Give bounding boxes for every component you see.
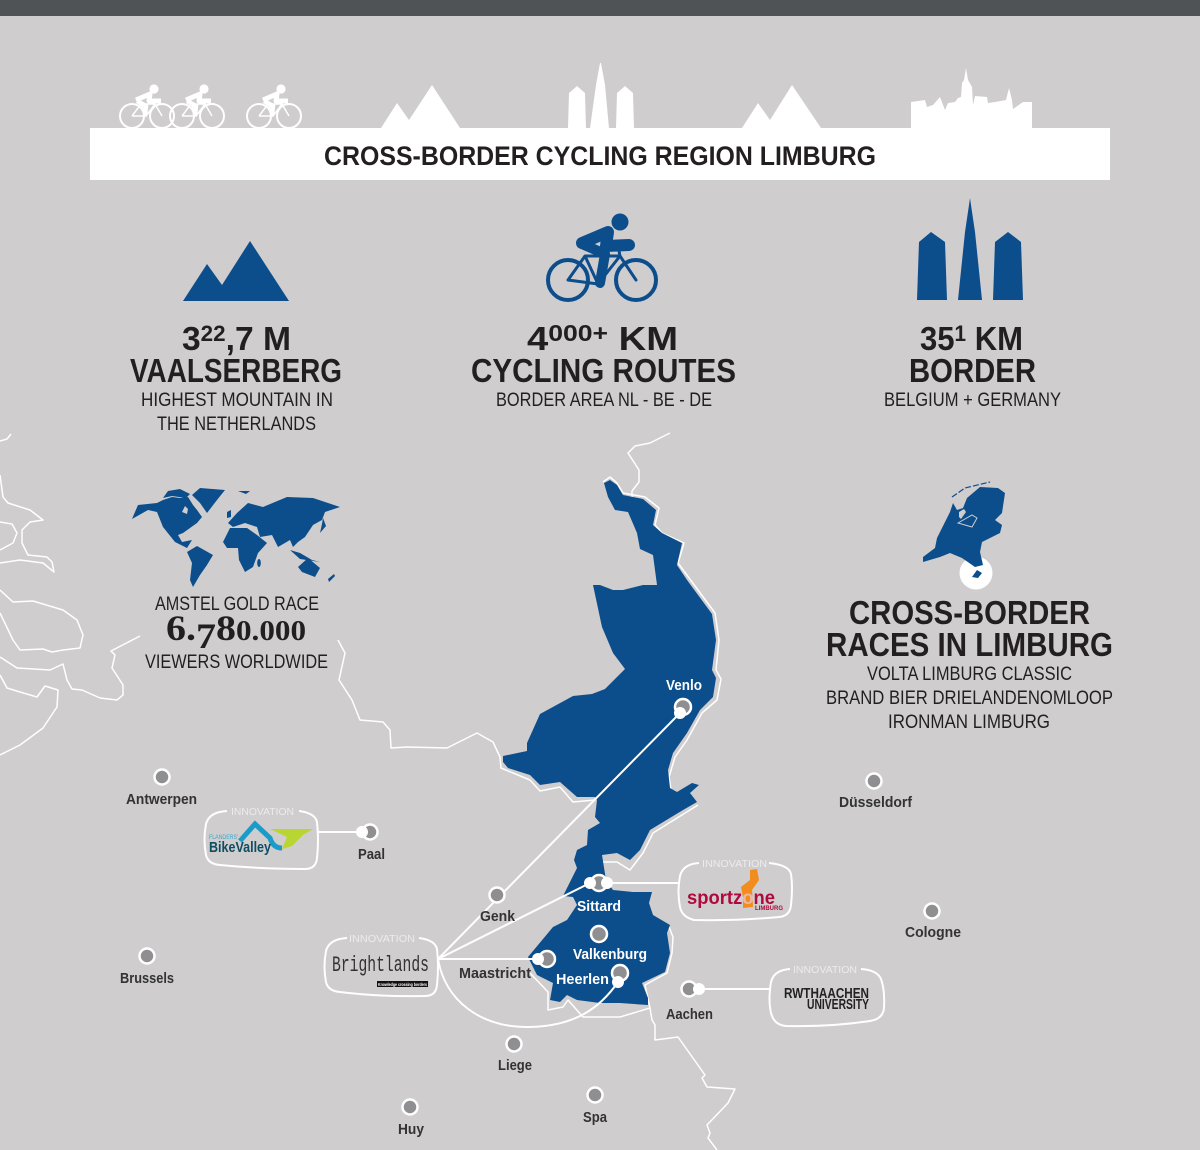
stat value: 6. xyxy=(166,608,193,648)
stat: mountain xyxy=(130,241,342,435)
stat: border xyxy=(884,198,1061,411)
stat description: HIGHEST MOUNTAIN IN xyxy=(141,390,333,411)
icon: Netherlands map xyxy=(923,482,1005,590)
race list: IRONMAN LIMBURG xyxy=(888,712,1050,733)
innovation box: Flanders Bike Valley: INNOVATION xyxy=(231,806,294,818)
city: Genk xyxy=(480,888,516,925)
stat value: 7 xyxy=(196,616,216,656)
stat heading: BORDER xyxy=(909,352,1036,389)
logo: Brightlands xyxy=(332,953,429,987)
stat: cycling routes xyxy=(471,214,736,411)
innovation box: Sportzone Limburg xyxy=(678,858,792,920)
city: Düsseldorf: Düsseldorf xyxy=(839,795,912,811)
city: Spa: Spa xyxy=(583,1110,608,1126)
logo: RWTH Aachen University: UNIVERSITY xyxy=(807,997,869,1013)
city: Cologne: Cologne xyxy=(905,925,961,941)
logo: RWTH Aachen University: RWTHAACHEN xyxy=(784,986,869,1002)
logo: Sportzone xyxy=(687,869,783,912)
city: Antwerpen xyxy=(126,770,197,808)
logo: Bike Valley: FLANDERS' xyxy=(209,834,238,841)
city: Brussels: Brussels xyxy=(120,971,174,987)
stat heading: CYCLING ROUTES xyxy=(471,352,736,389)
city: Aachen xyxy=(666,982,713,1023)
city: Valkenburg: Valkenburg xyxy=(573,947,647,963)
innovation box: Flanders Bike Valley xyxy=(204,806,318,869)
city: Brussels xyxy=(120,948,174,987)
icon: mountain xyxy=(183,241,289,301)
city: Liege: Liege xyxy=(498,1058,532,1074)
stat value: 3 xyxy=(182,320,200,357)
innovation box: Brightlands: INNOVATION xyxy=(349,933,415,945)
stat value: 35 xyxy=(920,320,957,357)
city: Cologne xyxy=(905,904,961,941)
city: Paal xyxy=(356,824,385,863)
stat description xyxy=(141,390,333,435)
icon: banner skyline xyxy=(911,68,1032,128)
logo: Brightlands: Brightlands xyxy=(332,953,429,978)
race list: BRAND BIER DRIELANDENOMLOOP xyxy=(826,688,1113,709)
banner skyline xyxy=(90,63,1110,180)
stat heading: RACES IN LIMBURG xyxy=(826,626,1113,663)
innovation box: RWTH Aachen University xyxy=(770,964,884,1026)
logo: Bike Valley: BikeValley xyxy=(209,839,272,856)
city: Antwerpen: Antwerpen xyxy=(126,792,197,808)
race list: VOLTA LIMBURG CLASSIC xyxy=(867,664,1072,685)
stat: world viewers xyxy=(132,488,340,673)
stat description: BELGIUM + GERMANY xyxy=(884,390,1061,411)
logo: RWTH Aachen University xyxy=(784,986,869,1013)
banner panel xyxy=(90,128,1110,180)
city: Düsseldorf xyxy=(839,774,912,811)
stat value: KM xyxy=(966,320,1023,357)
icon: towers xyxy=(917,198,1023,300)
city: Venlo: Venlo xyxy=(666,678,702,694)
stat value: 4 xyxy=(527,320,545,357)
stat value: 1 xyxy=(955,321,966,346)
city: Heerlen xyxy=(556,965,628,988)
city: Sittard xyxy=(577,875,621,915)
map: border lines xyxy=(0,433,735,1150)
city: Heerlen: Heerlen xyxy=(556,972,609,988)
city: Venlo xyxy=(666,678,702,719)
stat value: 0.000 xyxy=(236,616,306,647)
icon: banner mountains left xyxy=(381,85,460,128)
icon: banner mountains right xyxy=(742,85,821,128)
city: Liege xyxy=(498,1036,532,1074)
city: Huy: Huy xyxy=(398,1122,424,1138)
title: CROSS-BORDER CYCLING REGION LIMBURG xyxy=(324,141,876,171)
city: Aachen: Aachen xyxy=(666,1007,713,1023)
stat value: 000+ xyxy=(548,320,608,346)
stat value: ,7 M xyxy=(226,320,291,357)
stat description: BORDER AREA NL - BE - DE xyxy=(496,390,712,411)
city: Valkenburg xyxy=(573,926,647,963)
map: Limburg province xyxy=(503,480,716,1005)
logo: Bike Valley xyxy=(209,824,313,856)
logo: Brightlands: Knowledge crossing borders xyxy=(378,982,427,987)
city: Huy xyxy=(398,1100,424,1138)
stat heading xyxy=(826,594,1113,663)
icon: banner towers xyxy=(568,63,634,128)
innovation box: RWTH Aachen University: INNOVATION xyxy=(793,964,857,976)
icon: cyclist xyxy=(548,214,656,300)
stat value: 8 xyxy=(216,608,236,648)
stat value: 22 xyxy=(201,321,226,346)
stat label: AMSTEL GOLD RACE xyxy=(155,594,319,615)
logo: Sportzone: sportzone xyxy=(687,888,775,909)
innovation box: Brightlands xyxy=(324,933,438,996)
stat value: KM xyxy=(608,320,678,357)
city: Maastricht: Maastricht xyxy=(459,966,531,982)
top bar xyxy=(0,0,1200,16)
stat: cross-border races xyxy=(826,482,1113,733)
stat description: THE NETHERLANDS xyxy=(157,414,316,435)
stat description: VIEWERS WORLDWIDE xyxy=(145,652,328,673)
city: Spa xyxy=(583,1088,608,1126)
city: Sittard: Sittard xyxy=(577,899,621,915)
connector lines xyxy=(318,713,770,1027)
icon: cyclist silhouettes xyxy=(120,84,301,128)
icon: world map xyxy=(132,488,340,587)
city: Maastricht xyxy=(459,951,555,982)
city: Paal: Paal xyxy=(358,847,385,863)
stat heading: CROSS-BORDER xyxy=(849,594,1090,631)
race list xyxy=(826,664,1113,733)
innovation box: Sportzone Limburg: INNOVATION xyxy=(702,858,767,870)
city: Genk: Genk xyxy=(480,909,516,925)
stat heading: VAALSERBERG xyxy=(130,352,342,389)
logo: Sportzone: LIMBURG xyxy=(755,905,783,912)
